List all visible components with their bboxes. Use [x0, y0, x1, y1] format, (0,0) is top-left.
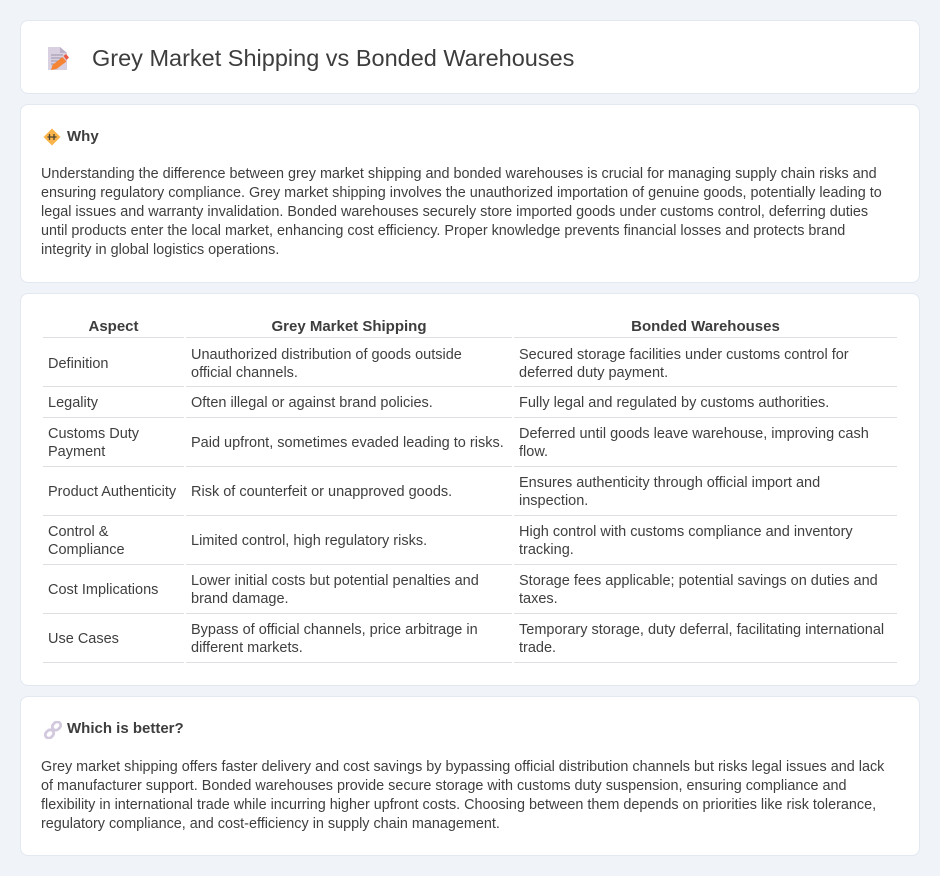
- comparison table: Compliance: [48, 542, 125, 558]
- comparison table: Definition: [48, 356, 108, 372]
- text block: why: legal issues and warranty invalidation. Bonded warehouses securely store imported goods under customs control, deferring duties: [41, 204, 868, 220]
- text block: why: until products enter the local market, enhancing cost efficiency. Proper knowledge prevents financial losses and protects brand: [41, 223, 845, 239]
- comparison table: Storage fees applicable; potential savings on duties and: [519, 573, 878, 589]
- comparison table: Ensures authenticity through official import and: [519, 475, 820, 491]
- comparison table: Aspect: [88, 318, 139, 334]
- text block: why: integrity in global logistics operations.: [41, 242, 279, 258]
- icon: warning diamond: [44, 128, 60, 146]
- comparison table: Deferred until goods leave warehouse, improving cash: [519, 426, 869, 442]
- text block: which is better: of manufacturer support. Bonded warehouses provide secure storage with customs duty suspension, ensuring compliance and: [41, 778, 847, 794]
- comparison table: Fully legal and regulated by customs authorities.: [519, 395, 829, 411]
- comparison table: Secured storage facilities under customs control for: [519, 347, 849, 363]
- text block: which is better: regulatory compliance, and cost-efficiency in supply chain management.: [41, 816, 500, 832]
- panel: comparison table: [20, 293, 920, 686]
- comparison table: Lower initial costs but potential penalties and: [191, 573, 479, 589]
- comparison table: High control with customs compliance and inventory: [519, 524, 853, 540]
- heading: why: Why: [67, 128, 99, 145]
- comparison table: Use Cases: [48, 631, 119, 647]
- panel: which is better: [20, 696, 920, 856]
- comparison table: Payment: [48, 444, 105, 460]
- panel: why: [20, 104, 920, 283]
- comparison table: brand damage.: [191, 591, 289, 607]
- comparison table: Limited control, high regulatory risks.: [191, 533, 427, 549]
- comparison table: Unauthorized distribution of goods outside: [191, 347, 462, 363]
- text block: why: ensuring regulatory compliance. Grey market shipping involves the unauthorized importation of genuine goods, potentially leading to: [41, 185, 882, 201]
- heading: which is better: Which is better?: [67, 720, 184, 737]
- comparison table: Often illegal or against brand policies.: [191, 395, 433, 411]
- comparison table: official channels.: [191, 365, 298, 381]
- comparison table: different markets.: [191, 640, 303, 656]
- comparison table: Customs Duty: [48, 426, 139, 442]
- comparison table: taxes.: [519, 591, 558, 607]
- comparison table: tracking.: [519, 542, 574, 558]
- comparison table: Bonded Warehouses: [631, 318, 780, 334]
- comparison table: Legality: [48, 395, 98, 411]
- text block: why: [41, 166, 882, 258]
- text block: which is better: flexibility in international trade while incurring higher upfront costs. Choosing between them depends on priorities like risk tolerance,: [41, 797, 876, 813]
- comparison table: Control &: [48, 524, 108, 540]
- comparison table: Temporary storage, duty deferral, facilitating international: [519, 622, 884, 638]
- comparison table: inspection.: [519, 493, 588, 509]
- comparison table: [43, 318, 897, 663]
- comparison table: Grey Market Shipping: [271, 318, 427, 334]
- comparison table: Product Authenticity: [48, 484, 176, 500]
- comparison table: Paid upfront, sometimes evaded leading to risks.: [191, 435, 504, 451]
- text block: which is better: Grey market shipping offers faster delivery and cost savings by bypassing official distribution channels but risks legal issues and lack: [41, 759, 884, 775]
- comparison table: Risk of counterfeit or unapproved goods.: [191, 484, 452, 500]
- comparison table: Bypass of official channels, price arbitrage in: [191, 622, 478, 638]
- icon: chain link: [44, 721, 62, 739]
- text block: which is better: [41, 759, 884, 832]
- comparison table: Cost Implications: [48, 582, 158, 598]
- comparison table: deferred duty payment.: [519, 365, 668, 381]
- comparison table: trade.: [519, 640, 556, 656]
- text block: why: Understanding the difference between grey market shipping and bonded warehouses is crucial for managing supply chain risks and: [41, 166, 877, 182]
- comparison table: flow.: [519, 444, 548, 460]
- title: Grey Market Shipping vs Bonded Warehouses: [92, 45, 574, 71]
- panel: header: [20, 20, 920, 94]
- icon: document with pencil: [48, 47, 69, 70]
